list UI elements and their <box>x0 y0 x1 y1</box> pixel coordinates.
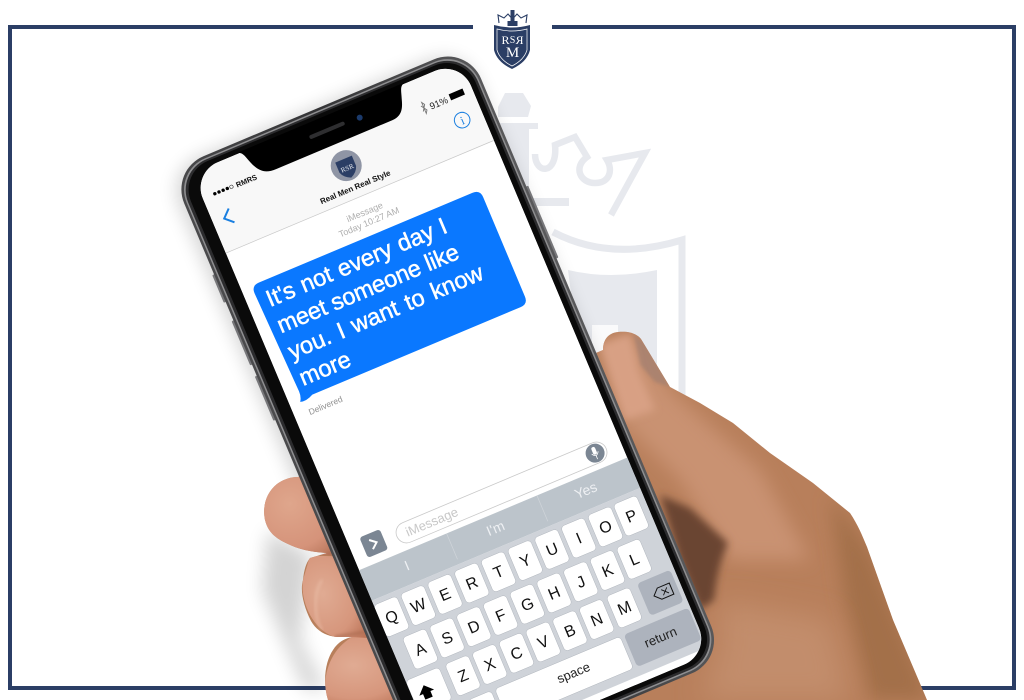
logo: crest at top of frame: M <box>506 45 519 61</box>
message input: iMessage <box>403 504 460 539</box>
keyboard row two: F <box>493 607 509 626</box>
space key: space <box>555 659 592 686</box>
keyboard row one <box>373 495 650 638</box>
nav bar <box>192 60 494 253</box>
keyboard row three: M <box>615 598 634 619</box>
backspace key <box>637 570 684 616</box>
shift key <box>406 667 452 700</box>
thumb tip <box>600 334 655 420</box>
screen <box>189 59 712 700</box>
battery <box>449 89 465 100</box>
contact avatar <box>330 150 362 182</box>
message bubble <box>251 190 529 403</box>
message text: you. I want to know <box>284 259 488 364</box>
notch <box>235 82 418 181</box>
logo: crest at top of frame: S <box>510 35 515 46</box>
watermark crest behind phone <box>478 93 682 520</box>
keyboard row three: N <box>588 610 606 631</box>
return key: return <box>642 624 679 651</box>
keyboard row two: S <box>439 629 456 649</box>
keyboard row three <box>445 587 643 697</box>
keyboard row one: W <box>408 595 430 617</box>
palm highlight <box>710 604 846 700</box>
logo: crest at top of frame <box>494 10 530 69</box>
keyboard row one: Q <box>383 607 401 628</box>
drop shadow of phone and fingers <box>165 47 721 700</box>
signal dots <box>213 185 234 196</box>
finger three <box>325 637 393 700</box>
return key <box>624 608 702 667</box>
keyboard row two: D <box>466 618 483 638</box>
suggestion bar: I'm <box>484 517 507 539</box>
keyboard row two <box>402 538 653 670</box>
finger two crease <box>316 580 322 630</box>
keyboard row one: T <box>491 563 507 582</box>
mic button <box>586 444 605 463</box>
speaker <box>309 121 345 139</box>
info icon: i <box>458 113 467 128</box>
timestamp: Today 10:27 AM <box>337 205 401 239</box>
phone body <box>170 45 725 700</box>
keyboard row two: G <box>519 595 537 615</box>
suggestion bar <box>356 457 642 602</box>
keyboard row three: V <box>535 633 552 653</box>
keyboard row one: E <box>437 585 454 605</box>
side buttons <box>212 149 574 421</box>
keyboard row two: K <box>600 561 616 581</box>
bluetooth icon <box>420 102 428 114</box>
carrier label: RMRS <box>235 173 258 189</box>
keyboard row two: A <box>413 640 429 660</box>
timestamp service label: iMessage <box>345 200 384 224</box>
back chevron <box>222 208 235 224</box>
logo: crest at top of frame: R <box>515 33 524 47</box>
space key <box>495 636 634 700</box>
keyboard row three: C <box>508 644 526 664</box>
message text: meet someone like <box>273 239 463 338</box>
keyboard row three: Z <box>456 667 471 686</box>
dictation key <box>470 692 495 700</box>
apps button <box>360 530 388 557</box>
keyboard row one: O <box>597 518 615 538</box>
keyboard row one: R <box>464 574 481 594</box>
keyboard row two: H <box>546 584 563 604</box>
keyboard row two: L <box>627 551 642 570</box>
keyboard row one: P <box>623 507 640 527</box>
contact name: Real Men Real Style <box>319 168 392 206</box>
keyboard row three: X <box>482 655 499 675</box>
keyboard row one: U <box>544 540 561 560</box>
shaded palm edge <box>830 495 930 700</box>
finger two <box>303 556 370 640</box>
suggestion bar: I <box>402 557 412 573</box>
contact avatar: RSR <box>340 162 355 175</box>
keyboard row one: Y <box>517 551 534 571</box>
dark gap behind phone <box>660 495 728 610</box>
message text: It's not every day I <box>262 213 451 312</box>
finger crease shadow <box>331 556 364 637</box>
thumb nail <box>634 336 668 386</box>
hand holding phone <box>240 320 940 700</box>
phone <box>168 45 727 700</box>
message input <box>393 439 610 546</box>
keyboard row three: B <box>562 622 579 642</box>
thumb highlight <box>600 335 810 560</box>
keyboard row one: I <box>574 530 584 548</box>
message text: more <box>295 346 355 391</box>
logo: crest at top of frame: R <box>501 33 510 47</box>
finger one <box>264 476 329 555</box>
camera <box>356 114 364 122</box>
suggestion bar: Yes <box>572 478 599 502</box>
info icon <box>454 112 470 128</box>
keyboard row two: J <box>574 573 588 592</box>
delivered label: Delivered <box>307 394 344 417</box>
keyboard <box>369 487 709 700</box>
battery percent: 91% <box>428 95 450 113</box>
gap sliver between thumb and hand <box>655 473 690 504</box>
